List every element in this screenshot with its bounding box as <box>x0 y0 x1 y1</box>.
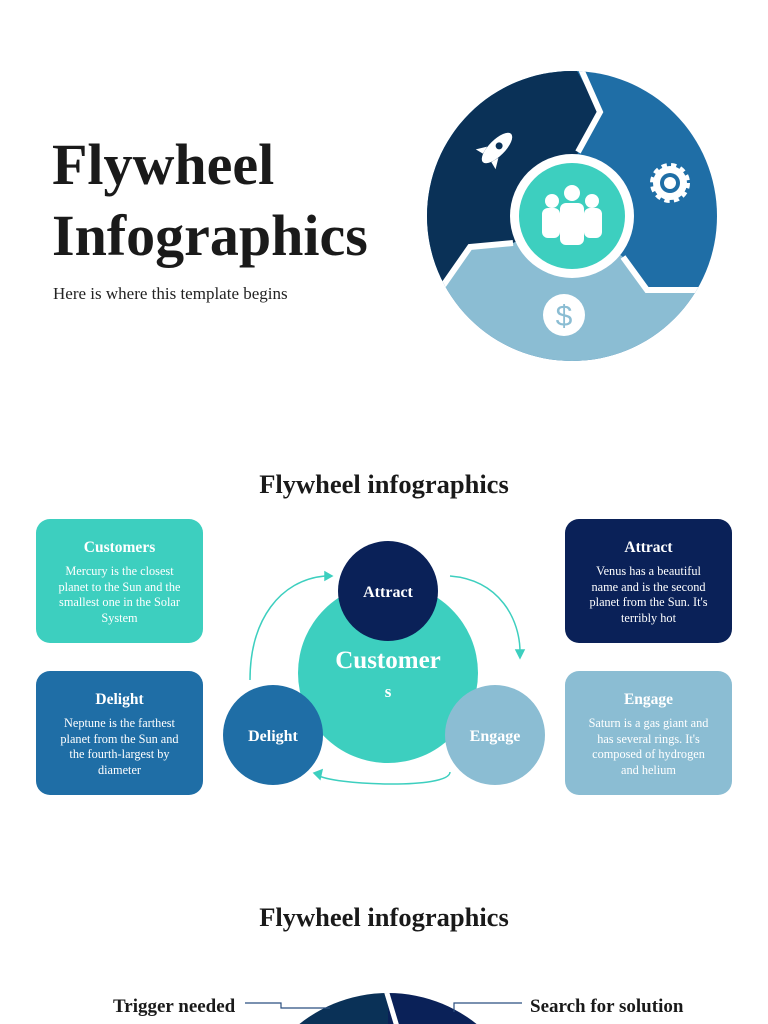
box: attract: Venus has a beautiful name and is the second planet from the Sun. It's terribly hot <box>590 564 708 624</box>
label: trigger: Trigger needed <box>113 996 236 1017</box>
circle: engage <box>445 685 545 785</box>
box: customers <box>36 519 203 643</box>
bottom pie <box>300 993 476 1024</box>
circle: attract <box>338 541 438 641</box>
box: attract: Attract <box>624 539 673 556</box>
circle: attract: Attract <box>363 584 414 601</box>
arrows <box>250 572 524 784</box>
icon: dollar <box>543 294 585 336</box>
icon: people <box>519 163 625 269</box>
flywheel graphic <box>113 71 717 1024</box>
subtitle: Here is where this template begins <box>53 284 288 303</box>
box: delight <box>36 671 203 795</box>
box: delight: Delight <box>95 691 144 708</box>
box: engage: Saturn is a gas giant and has several rings. It's composed of hydrogen and helium <box>589 716 708 776</box>
heading 3: Flywheel infographics <box>259 902 509 932</box>
box: attract <box>565 519 732 643</box>
title: Flywheel <box>52 132 274 197</box>
leader lines <box>245 1003 522 1012</box>
center circle: s <box>385 682 392 701</box>
title <box>52 132 368 268</box>
box: customers: Customers <box>84 539 155 556</box>
icon: rocket <box>473 124 521 172</box>
center circle <box>298 583 478 763</box>
icon: gear <box>653 166 687 200</box>
heading 2: Flywheel infographics <box>259 469 509 499</box>
title: Infographics <box>52 203 368 268</box>
box: customers: Mercury is the closest planet to the Sun and the smallest one in the Solar System <box>59 564 180 624</box>
box: engage: Engage <box>624 691 673 708</box>
icon: dollar: $ <box>556 300 573 333</box>
box: delight: Neptune is the farthest planet from the Sun and the fourth-largest by diameter <box>60 716 179 776</box>
label: search: Search for solution <box>530 996 684 1017</box>
center circle: Customer <box>335 647 441 674</box>
circle: engage: Engage <box>470 728 520 745</box>
circle: delight <box>223 685 323 785</box>
box: engage <box>565 671 732 795</box>
circle: delight: Delight <box>248 728 299 745</box>
